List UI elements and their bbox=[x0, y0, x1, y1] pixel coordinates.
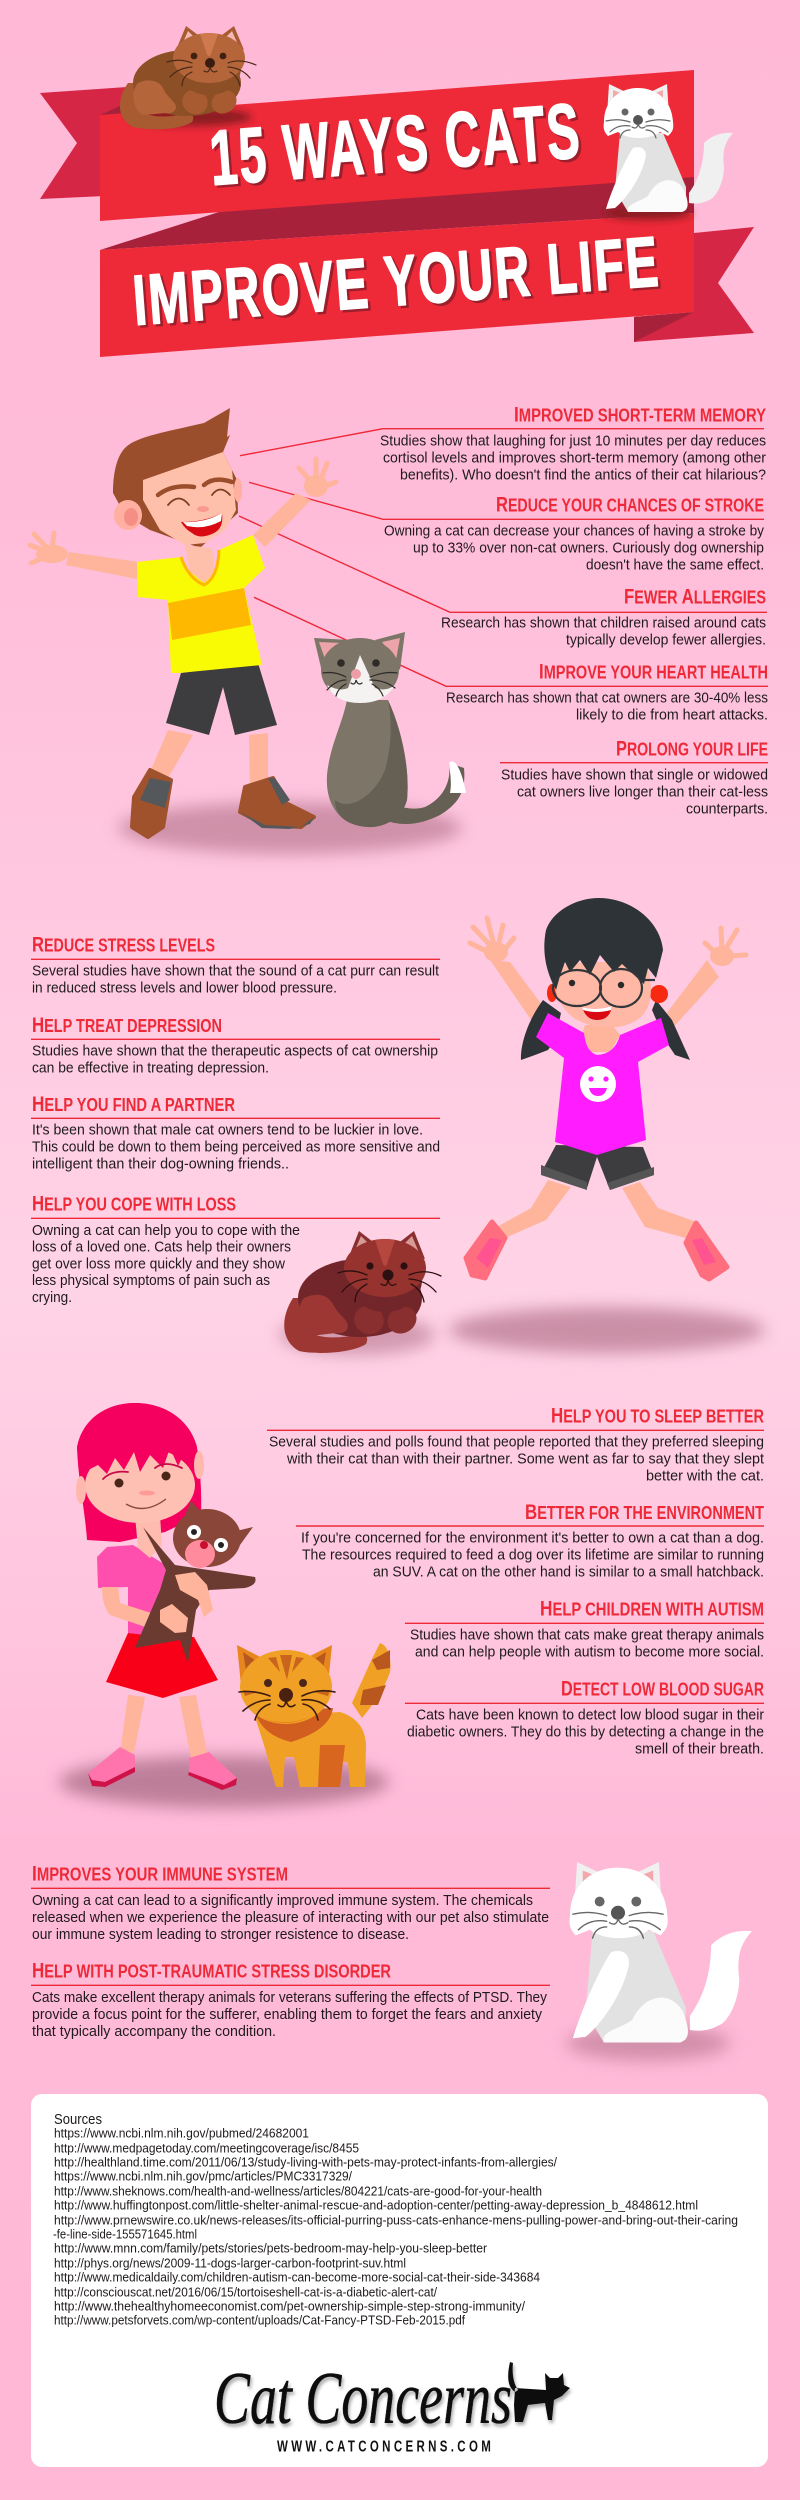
title line one bbox=[207, 86, 587, 204]
icon: black cat silhouette bbox=[508, 2362, 570, 2422]
hair bbox=[113, 408, 238, 548]
text: heart bbox=[446, 690, 768, 724]
website url: WWW.CATCONCERNS.COM bbox=[277, 2437, 491, 2455]
logo: Cat Concerns: Cat Concerns bbox=[214, 2358, 512, 2440]
illustration: laughing boy bbox=[30, 408, 462, 854]
text: autism: Studies have shown that cats make great therapy animals bbox=[410, 1627, 764, 1644]
text: life bbox=[501, 766, 768, 818]
sources list: http://www.medicaldaily.com/children-autism-can-become-more-social-cat-their-side-343684 bbox=[54, 2270, 540, 2284]
arms bbox=[66, 552, 138, 579]
text: memory: benefits). Who doesn't find the antics of their cat hilarious? bbox=[400, 467, 766, 484]
teddy bbox=[135, 1501, 256, 1663]
heading: help you cope with loss: HELP YOU COPE WITH LOSS bbox=[32, 1192, 236, 1216]
text: depression bbox=[32, 1043, 438, 1077]
text: stroke: Owning a cat can decrease your chances of having a stroke by bbox=[384, 523, 764, 540]
sources list bbox=[53, 2127, 738, 2327]
glasses bbox=[553, 969, 655, 1007]
icon: white cat on banner bbox=[604, 84, 733, 220]
panel: health benefits bbox=[239, 403, 768, 818]
illustration: maroon cat bbox=[279, 1231, 441, 1355]
text: partner bbox=[32, 1122, 440, 1173]
arms bbox=[490, 960, 548, 1027]
text: life: cat owners live longer than their cat-less bbox=[517, 784, 768, 801]
illustration: jumping girl bbox=[449, 898, 765, 1353]
shorts bbox=[541, 1145, 654, 1190]
pigtails bbox=[521, 1000, 561, 1060]
text: immune: Owning a cat can lead to a significantly improved immune system. The chemicals bbox=[32, 1892, 533, 1909]
heading: improves your immune system: IMPROVES YOUR IMMUNE SYSTEM bbox=[32, 1862, 288, 1886]
text: sleep: better with the cat. bbox=[646, 1468, 764, 1485]
text: environment: an SUV. A cat on the other hand is similar to a small hatchback. bbox=[373, 1564, 764, 1581]
bangs bbox=[77, 1403, 197, 1474]
text: loss bbox=[32, 1222, 300, 1306]
text: immune bbox=[32, 1892, 549, 1943]
text: memory bbox=[380, 433, 766, 484]
text: loss: loss of a loved one. Cats help their owners bbox=[32, 1239, 291, 1256]
legs bbox=[120, 1695, 145, 1753]
text: memory: cortisol levels and improves short-term memory (among other bbox=[383, 450, 766, 467]
text: environment bbox=[301, 1530, 764, 1581]
text: loss: get over loss more quickly and they show bbox=[32, 1256, 285, 1273]
text: partner: This could be down to them being perceived as more sensitive and bbox=[32, 1139, 440, 1156]
text: heart: likely to die from heart attacks. bbox=[576, 707, 768, 724]
heading: fewer allergies: FEWER ALLERGIES bbox=[624, 584, 766, 608]
text: immune: our immune system leading to stronger resistence to disease. bbox=[32, 1926, 409, 1943]
shirt bbox=[536, 1013, 669, 1155]
text: stress: in reduced stress levels and lower blood pressure. bbox=[32, 980, 337, 997]
skirt bbox=[106, 1633, 218, 1698]
text: blood sugar: diabetic owners. They do this by detecting a change in the bbox=[407, 1724, 764, 1741]
text: blood sugar: smell of their breath. bbox=[635, 1741, 764, 1758]
text: loss: Owning a cat can help you to cope with the bbox=[32, 1222, 300, 1239]
text: memory: Studies show that laughing for just 10 minutes per day reduces bbox=[380, 433, 766, 450]
title banner bbox=[40, 70, 754, 357]
sources list: http://www.sheknows.com/health-and-wellness/articles/804221/cats-are-good-for-your-health bbox=[54, 2184, 542, 2198]
text: depression: Studies have shown that the therapeutic aspects of cat ownership bbox=[32, 1043, 438, 1060]
sources list: http://www.prnewswire.co.uk/news-releases/its-official-purring-puss-cats-enhance-mens-pulling-power-and-bring-out-their-caring bbox=[54, 2213, 738, 2227]
legs bbox=[150, 730, 193, 778]
mouth bbox=[582, 1006, 612, 1020]
neck and shirt bbox=[185, 545, 215, 585]
text: stroke: doesn't have the same effect. bbox=[586, 557, 764, 574]
sources list: -fe-line-side-155571645.html bbox=[53, 2227, 197, 2241]
text: environment: If you're concerned for the environment it's better to own a cat than a dog. bbox=[301, 1530, 764, 1547]
title line one: 15 WAYS CATS bbox=[207, 86, 584, 202]
text: loss: crying. bbox=[32, 1289, 72, 1306]
text: sleep bbox=[269, 1434, 765, 1485]
panel: practical benefits bbox=[267, 1404, 765, 1758]
hands bbox=[175, 1572, 213, 1617]
sources list: http://www.thehealthyhomeeconomist.com/pet-ownership-simple-step-strong-immunity/ bbox=[54, 2299, 526, 2313]
shirt bbox=[97, 1545, 190, 1640]
head bbox=[553, 962, 651, 1028]
text: life: Studies have shown that single or widowed bbox=[501, 766, 768, 783]
smiley bbox=[580, 1066, 616, 1102]
sources list: http://www.petsforvets.com/wp-content/uploads/Cat-Fancy-PTSD-Feb-2015.pdf bbox=[54, 2313, 465, 2327]
text: stress: Several studies have shown that the sound of a cat purr can result bbox=[32, 963, 440, 980]
illustration: orange tabby cat bbox=[237, 1643, 391, 1787]
sources heading: Sources bbox=[54, 2112, 102, 2128]
text: blood sugar: Cats have been known to detect low blood sugar in their bbox=[416, 1707, 764, 1724]
text: ptsd: that typically accompany the condition. bbox=[32, 2023, 276, 2040]
illustration: girl with teddy bbox=[59, 1403, 389, 1808]
text: sleep: Several studies and polls found that people reported that they preferred sleeping bbox=[269, 1434, 764, 1451]
icon: brown cat on banner bbox=[120, 26, 256, 129]
title line one: 15 WAYS CATS bbox=[209, 89, 587, 204]
sources list: https://www.ncbi.nlm.nih.gov/pmc/articles/PMC3317329/ bbox=[54, 2169, 353, 2183]
illustration: grey cat bbox=[314, 632, 466, 827]
text: ptsd: provide a focus point for the sufferer, enabling them to forget the fears and anxiety bbox=[32, 2006, 542, 2023]
sources list: https://www.ncbi.nlm.nih.gov/pubmed/24682001 bbox=[54, 2127, 309, 2141]
text: stroke: up to 33% over non-cat owners. Curiously dog ownership bbox=[413, 540, 764, 557]
text: immune: released when we experience the pleasure of interacting with our pet also stimulate bbox=[32, 1909, 549, 1926]
text: ptsd: Cats make excellent therapy animals for veterans suffering the effects of PTSD. They bbox=[32, 1989, 547, 2006]
text: depression: can be effective in treating depression. bbox=[32, 1060, 269, 1077]
text: allergies bbox=[441, 615, 766, 649]
shoes bbox=[88, 1747, 135, 1782]
shoes bbox=[132, 770, 171, 837]
shorts bbox=[166, 663, 277, 735]
legs bbox=[495, 1180, 571, 1238]
sources list: http://www.huffingtonpost.com/little-shelter-animal-rescue-and-adoption-center/petting-away-depression_b_4848612.html bbox=[54, 2198, 698, 2212]
heading: reduce stress levels: REDUCE STRESS LEVELS bbox=[32, 933, 215, 957]
face bbox=[85, 1447, 195, 1523]
text: loss: less physical symptoms of pain such as bbox=[32, 1272, 270, 1289]
text: autism bbox=[410, 1627, 764, 1661]
hair bbox=[544, 898, 663, 990]
text: stroke bbox=[384, 523, 764, 574]
text: partner: intelligent than their dog-owning friends.. bbox=[32, 1156, 289, 1173]
text: life: counterparts. bbox=[686, 801, 768, 818]
heading: help with post-traumatic stress disorder: HELP WITH POST-TRAUMATIC STRESS DISORDER bbox=[32, 1958, 391, 1982]
text: allergies: Research has shown that children raised around cats bbox=[441, 615, 766, 632]
heading: help you find a partner: HELP YOU FIND A PARTNER bbox=[32, 1092, 235, 1116]
heading: help treat depression: HELP TREAT DEPRESSION bbox=[32, 1013, 222, 1037]
panel: sources card bbox=[31, 2094, 768, 2467]
text: stress bbox=[32, 963, 440, 997]
hair back bbox=[77, 1403, 201, 1542]
text: heart: Research has shown that cat owners are 30-40% less bbox=[446, 690, 768, 707]
text: partner: It's been shown that male cat owners tend to be luckier in love. bbox=[32, 1122, 423, 1139]
sources list: http://www.mnn.com/family/pets/stories/pets-bedroom-may-help-you-sleep-better bbox=[54, 2241, 487, 2255]
connector lines bbox=[239, 429, 768, 763]
sources list: http://phys.org/news/2009-11-dogs-larger-carbon-footprint-suv.html bbox=[54, 2256, 406, 2270]
sources list: http://healthland.time.com/2011/06/13/study-living-with-pets-may-protect-infants-from-allergies/ bbox=[54, 2155, 557, 2169]
neck bbox=[582, 1025, 620, 1052]
panel: immune and PTSD bbox=[31, 1862, 550, 2040]
icon: white cat large bbox=[566, 1862, 752, 2061]
text: autism: and can help people with autism to become more social. bbox=[415, 1644, 764, 1661]
panel: emotional benefits bbox=[31, 933, 440, 1306]
text: sleep: with their cat than with their partner. Some went as far to say that they slept bbox=[286, 1451, 765, 1468]
mouth bbox=[181, 513, 222, 536]
arms bbox=[102, 1587, 180, 1636]
sources list: http://consciouscat.net/2016/06/15/tortoiseshell-cat-is-a-diabetic-alert-cat/ bbox=[54, 2285, 437, 2299]
sources list: http://www.medpagetoday.com/meetingcoverage/isc/8455 bbox=[54, 2141, 359, 2155]
text: ptsd bbox=[32, 1989, 547, 2040]
text: blood sugar bbox=[407, 1707, 764, 1758]
shoes bbox=[466, 1222, 505, 1278]
text: allergies: typically develop fewer allergies. bbox=[566, 632, 766, 649]
text: environment: The resources required to feed a dog over its lifetime are similar to running bbox=[302, 1547, 764, 1564]
face bbox=[143, 452, 236, 545]
